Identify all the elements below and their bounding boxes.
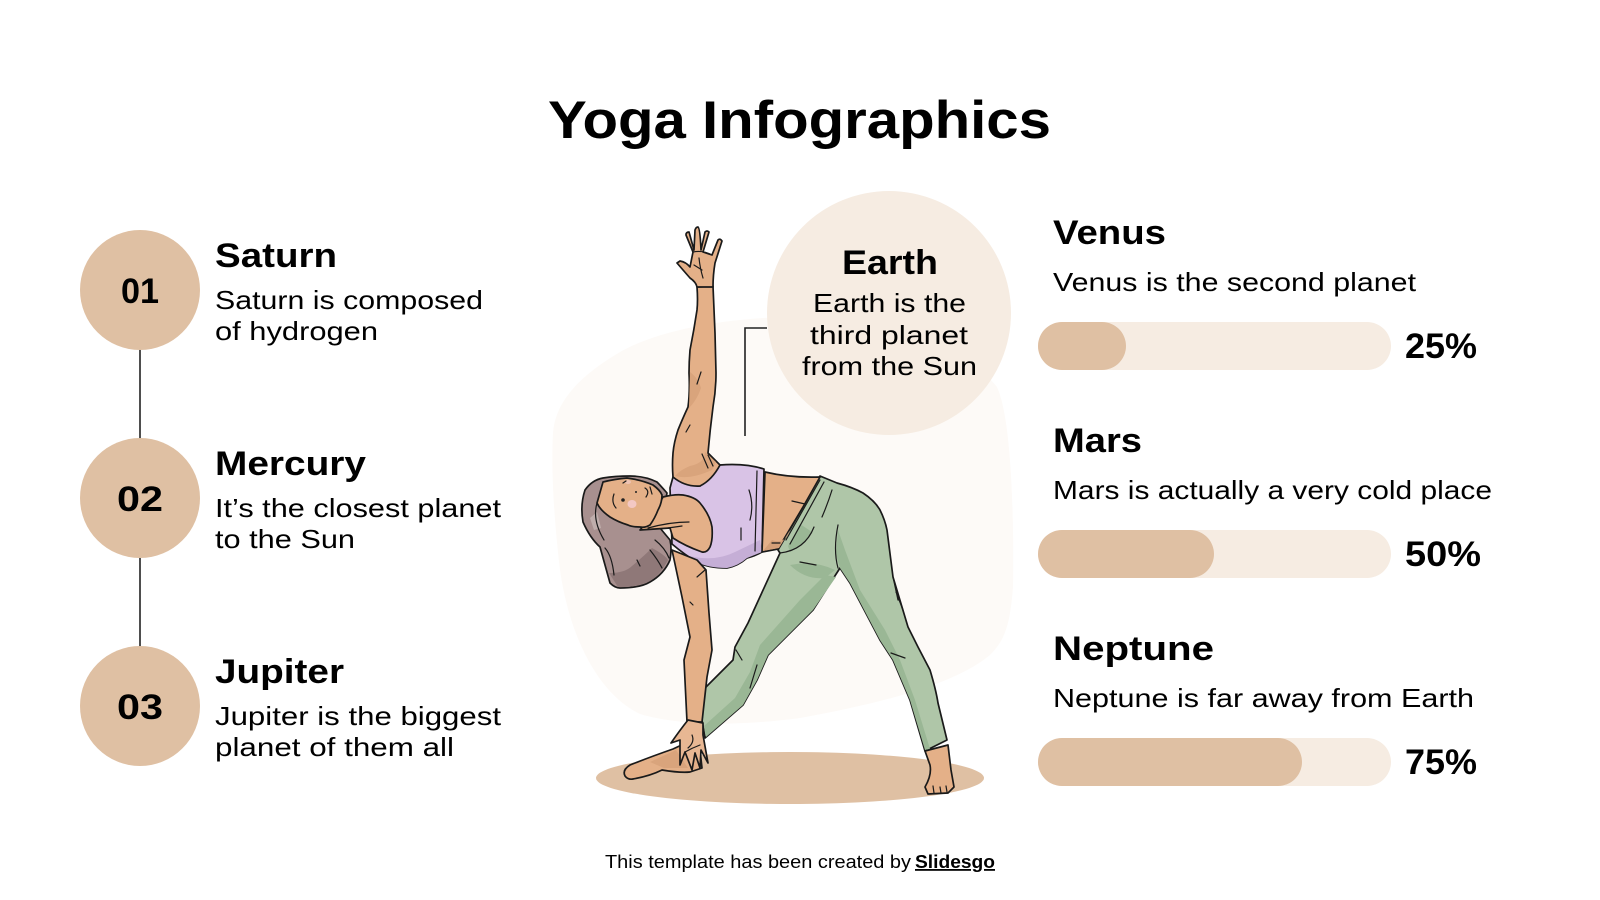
Venus progress: Venus bbox=[1053, 214, 1166, 252]
item 03 Jupiter: planet of them all bbox=[215, 732, 454, 762]
item 01 Saturn: Saturn is composed bbox=[215, 285, 483, 315]
connector line 1 bbox=[139, 349, 141, 439]
connector line 2 bbox=[139, 557, 141, 647]
left foot bbox=[624, 742, 702, 779]
title: Yoga Infographics bbox=[548, 91, 1051, 150]
lower hand bbox=[671, 720, 708, 770]
Venus progress: 25% bbox=[1405, 327, 1477, 366]
Venus progress: Venus is the second planet bbox=[1053, 267, 1417, 297]
crop top bbox=[670, 464, 764, 568]
callout: Earth: from the Sun bbox=[802, 351, 977, 381]
illustration: yoga figure bbox=[582, 227, 954, 794]
callout: Earth bbox=[767, 191, 1011, 435]
midriff bbox=[762, 472, 820, 552]
pants folds bbox=[736, 480, 905, 688]
item 03 Jupiter: 03 bbox=[117, 688, 163, 727]
item 02 Mercury: It’s the closest planet bbox=[215, 493, 502, 523]
cheek blush bbox=[628, 500, 636, 508]
Mars progress: Mars bbox=[1053, 422, 1142, 460]
neck and shoulder bbox=[640, 495, 712, 552]
item 01 Saturn bbox=[80, 230, 483, 350]
panel: progress bars bbox=[1038, 214, 1492, 786]
pants shading bbox=[704, 524, 930, 750]
hair shading bbox=[609, 548, 668, 587]
footer credit: This template has been created by bbox=[605, 852, 911, 872]
Neptune progress: Neptune is far away from Earth bbox=[1053, 683, 1474, 713]
Mars progress: Mars is actually a very cold place bbox=[1053, 475, 1492, 505]
Venus progress bbox=[1038, 214, 1477, 370]
crop top shading bbox=[690, 540, 762, 568]
pants bbox=[702, 476, 947, 751]
footer credit: Slidesgo bbox=[915, 852, 995, 872]
callout: Earth: third planet bbox=[810, 320, 969, 350]
hair bbox=[582, 476, 671, 588]
item 01 Saturn: Saturn bbox=[215, 237, 337, 275]
callout: Earth: Earth is the bbox=[813, 288, 966, 318]
right foot bbox=[925, 745, 954, 794]
panel: numbered list bbox=[80, 230, 502, 766]
item 03 Jupiter bbox=[80, 646, 502, 766]
callout connector bbox=[745, 328, 767, 436]
callout: Earth: Earth bbox=[842, 244, 938, 282]
item 01 Saturn: of hydrogen bbox=[215, 316, 378, 346]
Mars progress: 50% bbox=[1405, 535, 1481, 574]
lower arm bbox=[672, 550, 712, 722]
facial features bbox=[613, 481, 652, 508]
Neptune progress bbox=[1038, 630, 1477, 786]
background blob bbox=[552, 317, 1013, 724]
Neptune progress: 75% bbox=[1405, 743, 1477, 782]
item 02 Mercury: 02 bbox=[117, 480, 163, 519]
item 02 Mercury bbox=[80, 438, 502, 558]
hair highlight bbox=[590, 512, 601, 530]
item 03 Jupiter: Jupiter bbox=[215, 653, 344, 691]
raised arm shading bbox=[675, 372, 716, 477]
item 02 Mercury: to the Sun bbox=[215, 524, 355, 554]
raised arm bbox=[672, 286, 720, 486]
face bbox=[597, 478, 662, 527]
item 03 Jupiter: Jupiter is the biggest bbox=[215, 701, 502, 731]
Mars progress bbox=[1038, 422, 1492, 578]
eyebrow blush bbox=[625, 480, 631, 484]
raised hand bbox=[677, 227, 722, 287]
ground ellipse bbox=[596, 752, 984, 804]
item 01 Saturn: 01 bbox=[121, 272, 159, 311]
Neptune progress: Neptune bbox=[1053, 630, 1214, 668]
item 02 Mercury: Mercury bbox=[215, 445, 366, 483]
